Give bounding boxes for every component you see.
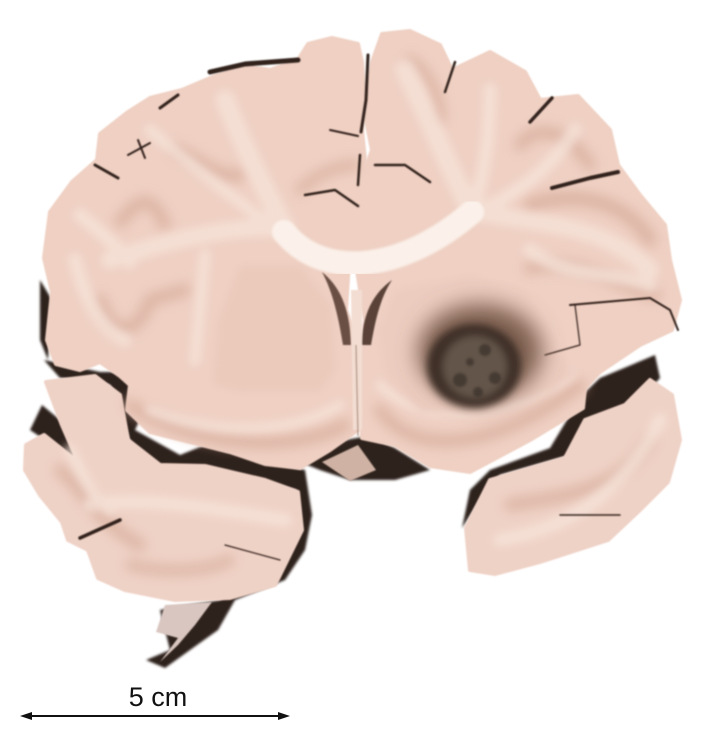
scale bar arrow	[20, 712, 290, 720]
scale bar label: 5 cm	[129, 682, 187, 712]
left temporal lobe	[25, 376, 302, 600]
lesion texture	[453, 344, 501, 397]
corpus callosum	[284, 212, 472, 263]
left basal ganglia	[212, 265, 336, 392]
lesion core	[442, 335, 508, 399]
sulci dark lines	[80, 55, 678, 560]
ventricles and midline	[322, 272, 392, 436]
right basal ganglia	[378, 275, 575, 412]
right temporal lobe	[466, 380, 680, 574]
cortical gray shading	[60, 60, 655, 570]
lesion halo	[418, 304, 542, 400]
upper-left hemisphere	[44, 38, 365, 468]
brainstem fragment	[156, 602, 212, 662]
lesion outer ring	[427, 324, 521, 408]
white matter tracts	[70, 70, 660, 540]
upper-right hemisphere	[352, 31, 680, 472]
midline fragment	[322, 445, 376, 481]
dark gaps between lobes	[30, 280, 660, 668]
